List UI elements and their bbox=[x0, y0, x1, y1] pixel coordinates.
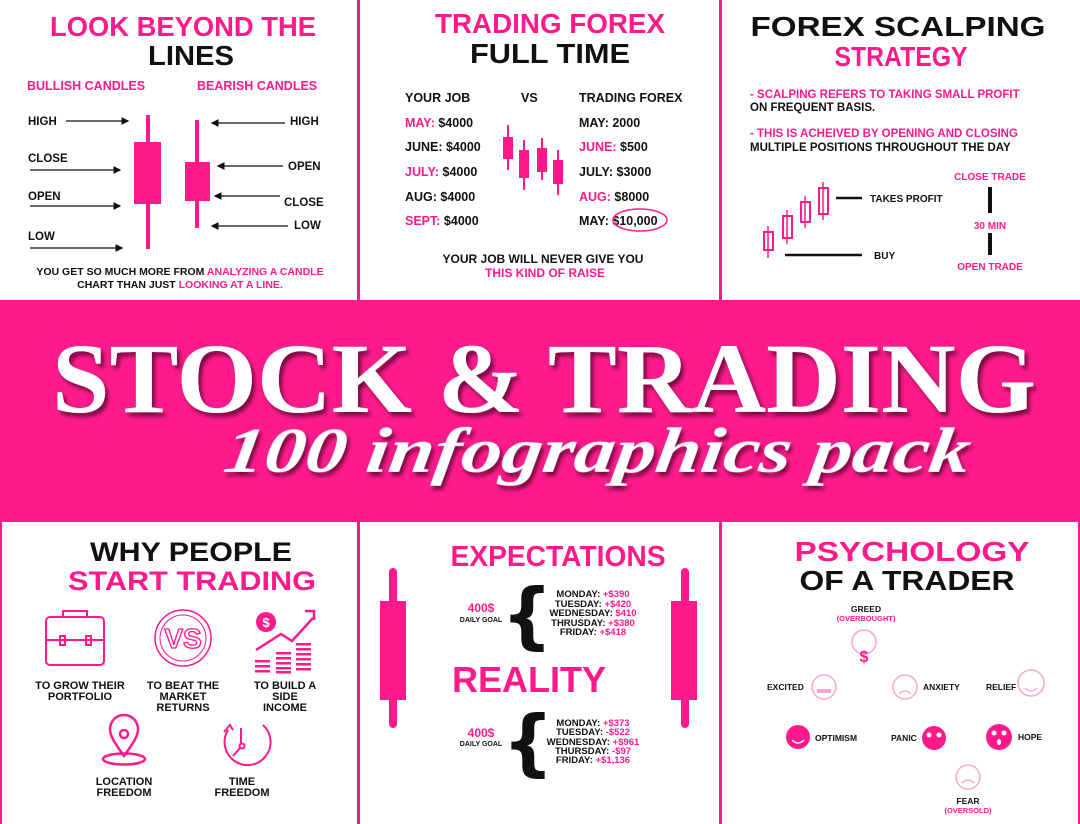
expectations heading: EXPECTATIONS bbox=[450, 541, 666, 573]
freedom labels: LOCATION bbox=[96, 776, 152, 788]
title bbox=[50, 11, 316, 71]
brace: { bbox=[502, 700, 554, 784]
reason labels: TO BEAT THE bbox=[147, 680, 219, 692]
reality list: TUESDAY: -$522 bbox=[556, 727, 630, 738]
freedom labels bbox=[96, 776, 270, 799]
caption bbox=[443, 252, 643, 280]
expectations list: MONDAY: +$390 bbox=[556, 589, 630, 600]
title: OF A TRADER bbox=[800, 565, 1014, 596]
bearish candle bbox=[185, 120, 210, 228]
table: JUNE: $500 bbox=[579, 140, 648, 154]
scalping chart bbox=[764, 182, 943, 262]
subheadings bbox=[27, 79, 317, 93]
table: AUG: $8000 bbox=[579, 190, 649, 204]
greed bbox=[837, 604, 896, 666]
reality goal: 400$ bbox=[468, 726, 495, 740]
freedom labels: TIME bbox=[229, 776, 255, 788]
hope: HOPE bbox=[1018, 732, 1042, 742]
description: ON FREQUENT BASIS. bbox=[750, 102, 875, 114]
greed: (OVERBOUGHT) bbox=[837, 614, 896, 623]
banner title: STOCK & TRADING bbox=[52, 323, 1036, 434]
reality list bbox=[547, 718, 640, 766]
reality list: THURSDAY: -$97 bbox=[555, 746, 631, 757]
highlight circle bbox=[613, 209, 667, 231]
excited bbox=[767, 675, 836, 699]
caption: THIS KIND OF RAISE bbox=[485, 266, 605, 280]
right labels with arrows: LOW bbox=[294, 220, 321, 232]
caption: CHART THAN JUST LOOKING AT A LINE. bbox=[77, 279, 283, 291]
excited: EXCITED bbox=[767, 682, 804, 692]
banner bbox=[0, 300, 1080, 522]
left labels with arrows: HIGH bbox=[28, 116, 57, 128]
brace: { bbox=[501, 573, 553, 657]
panel: expectations vs reality bbox=[380, 541, 697, 784]
title: TRADING FOREX bbox=[435, 8, 665, 39]
fear bbox=[944, 765, 992, 815]
trade timing: 30 MIN bbox=[974, 221, 1006, 232]
fear: FEAR bbox=[956, 796, 980, 806]
anxiety bbox=[893, 675, 960, 699]
panel: psychology of a trader bbox=[767, 536, 1044, 815]
relief bbox=[986, 670, 1044, 696]
panel: why people start trading bbox=[35, 537, 316, 799]
side candles bbox=[380, 568, 697, 728]
right labels with arrows bbox=[212, 116, 324, 232]
title bbox=[68, 537, 316, 596]
greed: $ bbox=[860, 649, 869, 666]
relief: RELIEF bbox=[986, 682, 1016, 692]
table: MAY: $4000 bbox=[405, 116, 473, 130]
right labels with arrows: HIGH bbox=[290, 116, 319, 128]
table: SEPT: $4000 bbox=[405, 214, 479, 228]
expectations goal bbox=[460, 601, 503, 624]
left labels with arrows: OPEN bbox=[28, 191, 61, 203]
panel: look beyond the lines bbox=[27, 11, 324, 291]
expectations list: TUESDAY: +$420 bbox=[555, 599, 631, 610]
title: WHY PEOPLE bbox=[90, 537, 292, 567]
caption: YOUR JOB WILL NEVER GIVE YOU bbox=[443, 252, 643, 266]
reason labels: INCOME bbox=[263, 702, 307, 714]
right labels with arrows: CLOSE bbox=[284, 197, 324, 209]
trade timing bbox=[954, 172, 1026, 273]
table: TRADING FOREX bbox=[579, 91, 683, 105]
title: LOOK BEYOND THE bbox=[50, 11, 316, 42]
title: FULL TIME bbox=[470, 38, 630, 69]
reason labels bbox=[35, 680, 316, 714]
reason labels: MARKET bbox=[159, 691, 207, 703]
table: YOUR JOB bbox=[405, 91, 470, 105]
title: PSYCHOLOGY bbox=[794, 536, 1030, 567]
reason labels: TO BUILD A bbox=[254, 680, 316, 692]
left labels with arrows: CLOSE bbox=[28, 153, 68, 165]
title bbox=[750, 11, 1046, 72]
table: JULY: $3000 bbox=[579, 165, 651, 179]
title: START TRADING bbox=[68, 566, 316, 596]
table: MAY: $10,000 bbox=[579, 214, 658, 228]
right labels with arrows: OPEN bbox=[288, 161, 321, 173]
caption bbox=[36, 266, 324, 291]
reason labels: PORTFOLIO bbox=[48, 691, 113, 703]
trade timing: OPEN TRADE bbox=[957, 262, 1023, 273]
icon: clock bbox=[224, 725, 271, 765]
icon: growth bbox=[255, 611, 314, 674]
reality list: WEDNESDAY: +$961 bbox=[547, 737, 640, 748]
table: JUNE: $4000 bbox=[405, 140, 481, 154]
trade timing: CLOSE TRADE bbox=[954, 172, 1026, 183]
panel: trading forex full time bbox=[405, 8, 683, 280]
description: MULTIPLE POSITIONS THROUGHOUT THE DAY bbox=[750, 142, 1011, 154]
icon: growth: $ bbox=[262, 615, 270, 630]
reason labels: RETURNS bbox=[156, 702, 210, 714]
title bbox=[794, 536, 1030, 596]
table bbox=[405, 91, 683, 228]
expectations list: THRUSDAY: +$380 bbox=[551, 618, 635, 629]
title: LINES bbox=[148, 40, 234, 71]
icon: vs: VS bbox=[164, 623, 202, 654]
expectations list: FRIDAY: +$418 bbox=[560, 627, 626, 638]
expectations goal: DAILY GOAL bbox=[460, 617, 503, 624]
description: - SCALPING REFERS TO TAKING SMALL PROFIT bbox=[750, 89, 1020, 101]
description bbox=[750, 89, 1020, 154]
subheadings: BEARISH CANDLES bbox=[197, 79, 317, 93]
icon: vs bbox=[155, 610, 211, 666]
scalping chart: TAKES PROFIT bbox=[870, 194, 943, 205]
scalping chart: BUY bbox=[874, 251, 895, 262]
reason labels: SIDE bbox=[272, 691, 298, 703]
expectations goal: 400$ bbox=[468, 601, 495, 615]
bullish candle bbox=[134, 115, 161, 249]
fear: (OVERSOLD) bbox=[944, 806, 992, 815]
reality list: FRIDAY: +$1,136 bbox=[556, 755, 630, 766]
icon: location bbox=[103, 715, 145, 764]
expectations list bbox=[549, 589, 637, 638]
freedom labels: FREEDOM bbox=[96, 787, 152, 799]
icon: briefcase bbox=[46, 611, 104, 665]
left labels with arrows bbox=[28, 116, 128, 248]
left labels with arrows: LOW bbox=[28, 231, 55, 243]
table: MAY: 2000 bbox=[579, 116, 640, 130]
description: - THIS IS ACHEIVED BY OPENING AND CLOSING bbox=[750, 128, 1018, 140]
hope bbox=[986, 724, 1042, 750]
title bbox=[435, 8, 665, 69]
freedom labels: FREEDOM bbox=[214, 787, 270, 799]
title: STRATEGY bbox=[834, 41, 968, 72]
reality heading: REALITY bbox=[452, 659, 606, 700]
table: VS bbox=[521, 91, 538, 105]
reason labels: TO GROW THEIR bbox=[35, 680, 125, 692]
banner subtitle: 100 infographics pack bbox=[220, 415, 976, 486]
title: FOREX SCALPING bbox=[750, 11, 1046, 42]
subheadings: BULLISH CANDLES bbox=[27, 79, 145, 93]
table: JULY: $4000 bbox=[405, 165, 477, 179]
panic bbox=[891, 726, 946, 750]
table: AUG: $4000 bbox=[405, 190, 475, 204]
panic: PANIC bbox=[891, 733, 917, 743]
panel: forex scalping strategy bbox=[750, 11, 1046, 273]
caption: YOU GET SO MUCH MORE FROM ANALYZING A CANDLE bbox=[36, 266, 324, 278]
mini candles bbox=[503, 125, 563, 195]
reality goal bbox=[460, 726, 503, 748]
anxiety: ANXIETY bbox=[923, 682, 960, 692]
optimism bbox=[786, 725, 857, 749]
reality list: MONDAY: +$373 bbox=[556, 718, 630, 729]
reality goal: DAILY GOAL bbox=[460, 741, 503, 748]
expectations list: WEDNESDAY: $410 bbox=[549, 608, 637, 619]
greed: GREED bbox=[851, 604, 881, 614]
optimism: OPTIMISM bbox=[815, 733, 857, 743]
